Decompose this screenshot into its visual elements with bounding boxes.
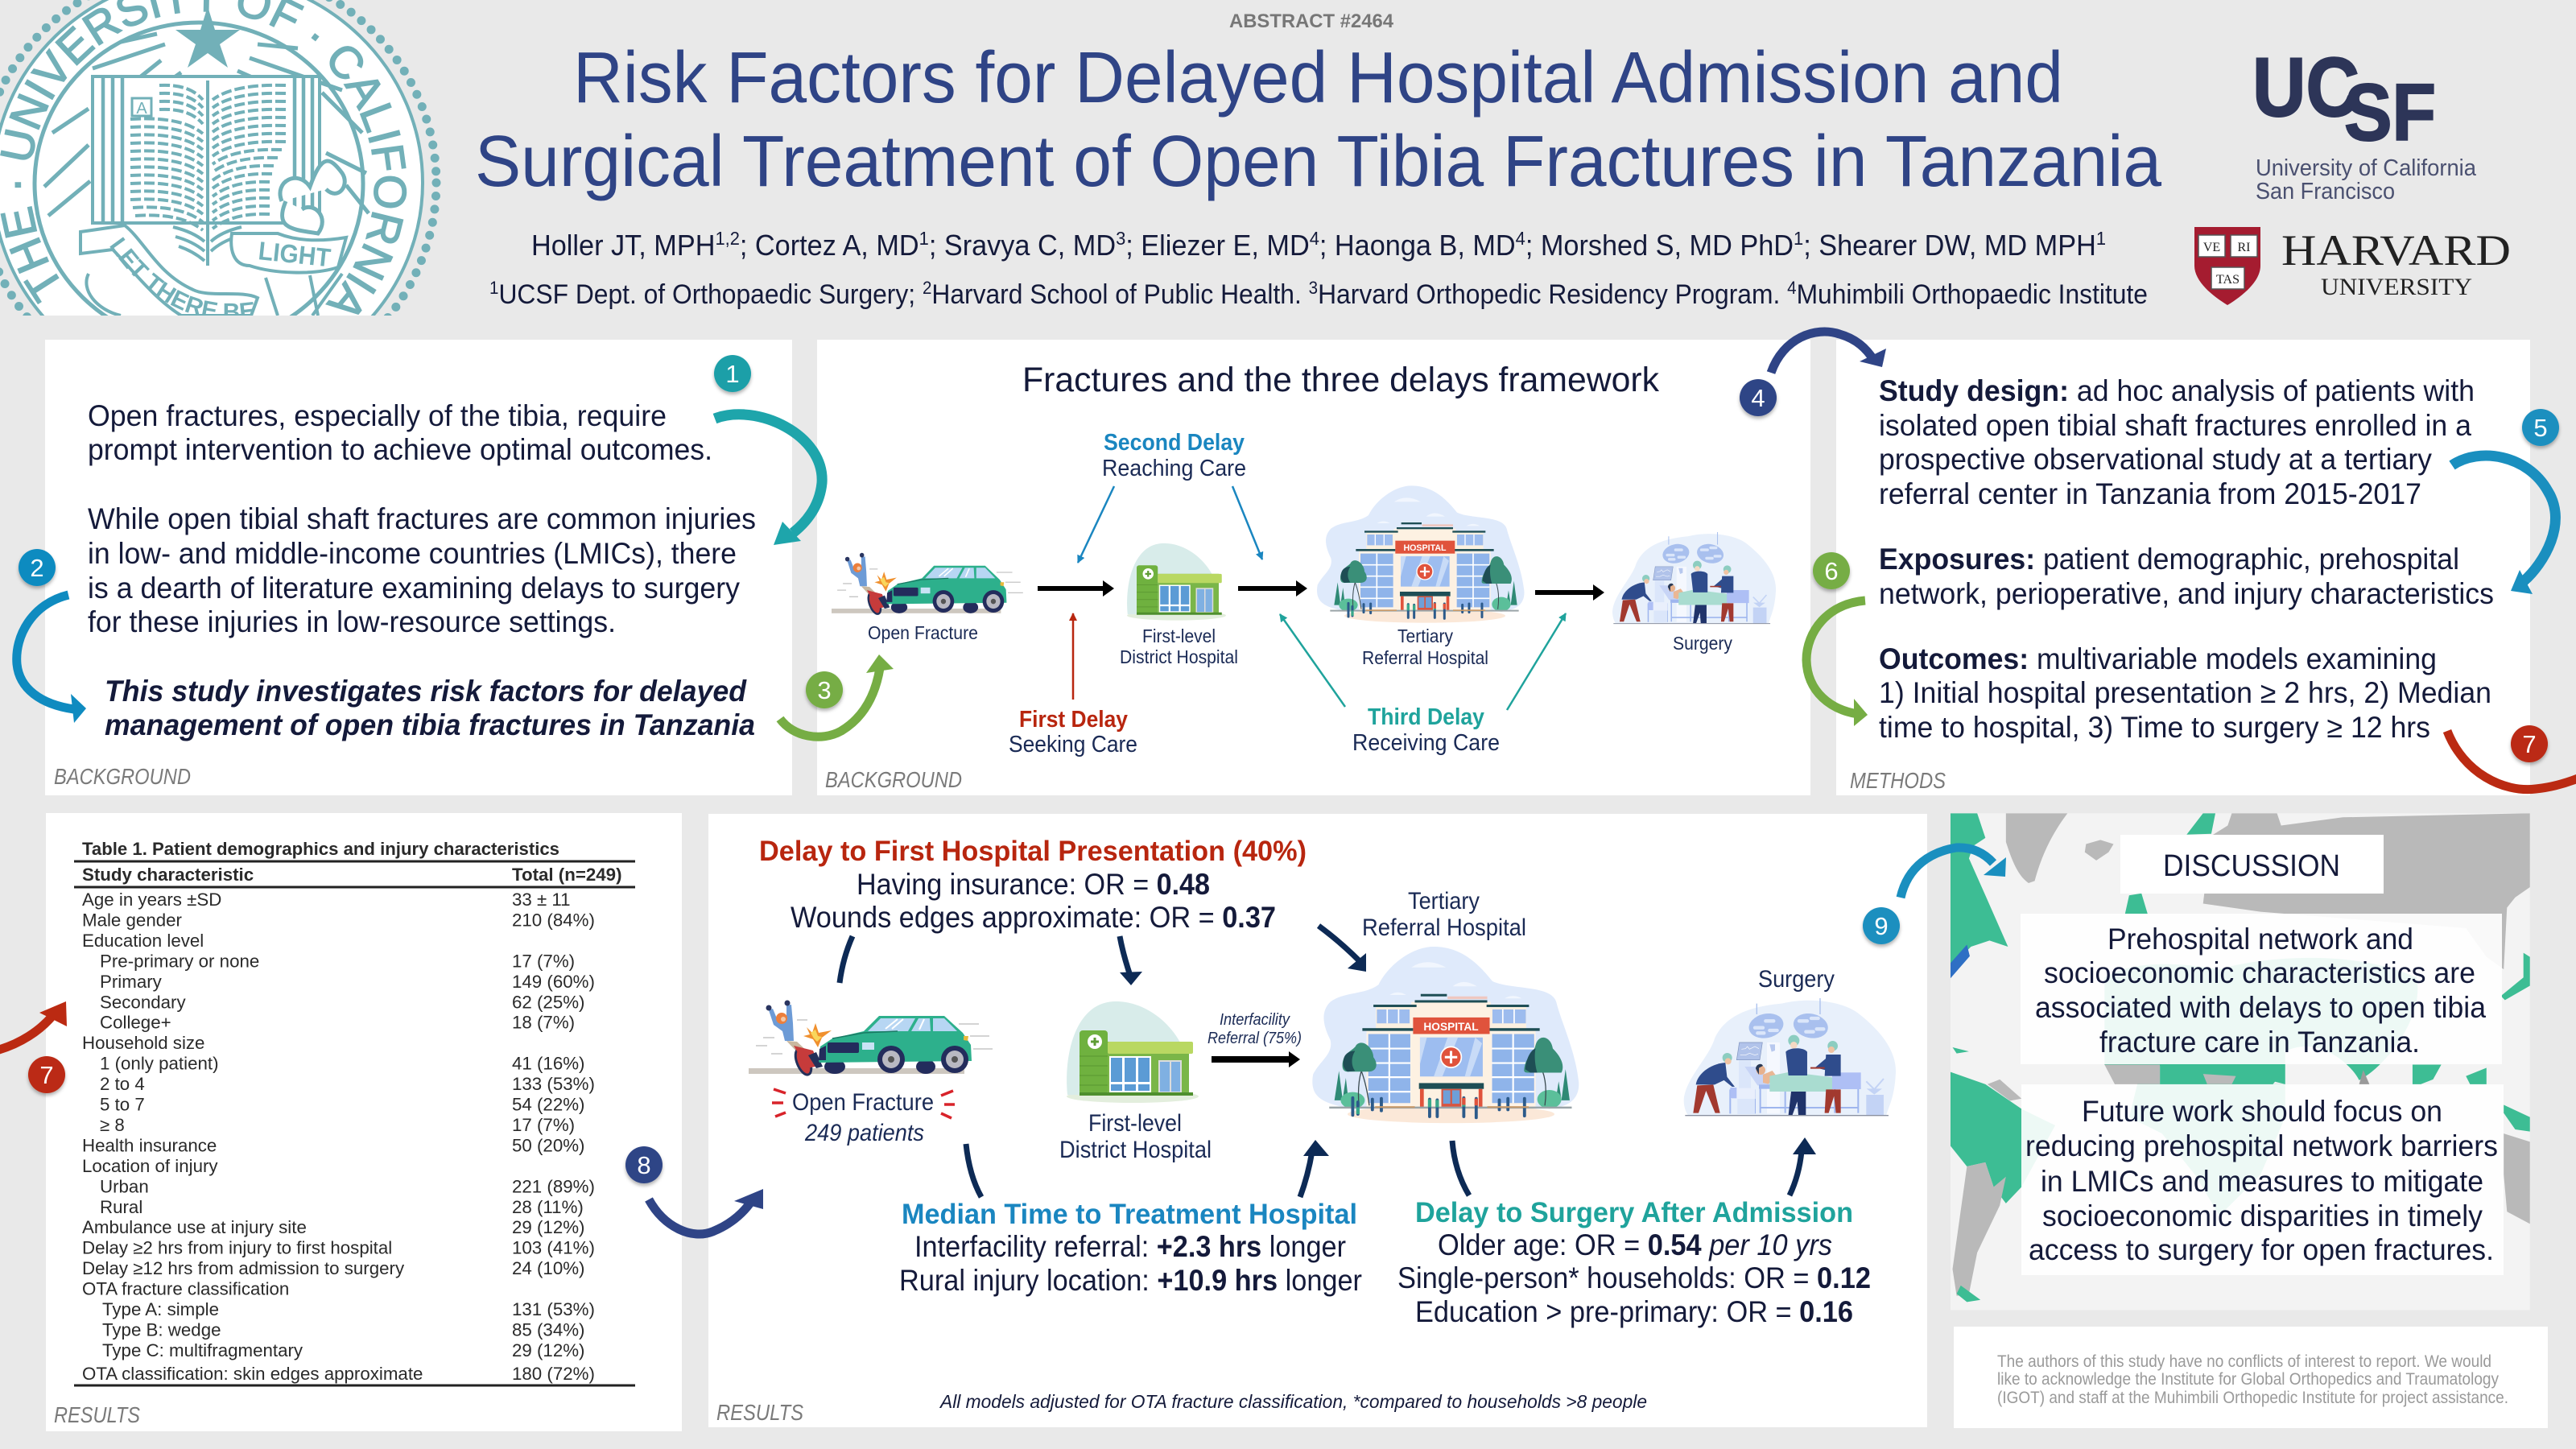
exposures xyxy=(1879,543,2494,610)
table rows: Ambulance use at injury site xyxy=(82,1217,307,1237)
icon: district clinic xyxy=(1127,543,1226,621)
intro text: in low- and middle-income countries (LMICs), there xyxy=(88,537,737,570)
future work box xyxy=(2021,1084,2504,1275)
arrow: to surgery xyxy=(1790,1137,1816,1195)
arrow: hospital link xyxy=(1452,1141,1469,1195)
interfacility referral note: Referral (75%) xyxy=(1208,1030,1302,1047)
step 1 badge and arrow xyxy=(714,355,822,545)
affiliations: 3 xyxy=(1309,278,1318,298)
step 6 badge and arrow xyxy=(1806,552,1868,726)
intro text: Open fractures, especially of the tibia, require xyxy=(88,399,667,432)
surgery delay results xyxy=(1397,1197,1871,1328)
conclusion box: associated with delays to open tibia xyxy=(2035,991,2486,1024)
table rows: Rural xyxy=(100,1197,142,1217)
table rows: 5 to 7 xyxy=(100,1095,145,1114)
step 4 badge and arrow xyxy=(1740,332,1886,416)
table rows: OTA classification: skin edges approximate xyxy=(82,1364,423,1384)
outcomes: Outcomes: multivariable models examining xyxy=(1879,642,2437,675)
step 2 badge and arrow xyxy=(17,549,86,723)
future work box: socioeconomic disparities in timely xyxy=(2042,1199,2483,1232)
table rows: 29 (12%) xyxy=(512,1340,584,1360)
table rows: ≥ 8 xyxy=(100,1115,125,1135)
step 9 badge and arrow xyxy=(1863,848,2006,944)
step 7 badge and arrow xyxy=(2447,725,2576,790)
future work box: Future work should focus on xyxy=(2082,1095,2442,1128)
icon: district clinic xyxy=(1067,1001,1199,1103)
authors: 4 xyxy=(1310,228,1319,249)
table rows: Delay ≥12 hrs from admission to surgery xyxy=(82,1258,405,1278)
authors: 1 xyxy=(2096,228,2106,249)
intro text: While open tibial shaft fractures are common injuries xyxy=(88,502,756,535)
Harvard logo: VE xyxy=(2203,241,2220,254)
table rows: 62 (25%) xyxy=(512,992,584,1012)
icon: referral hospital xyxy=(1317,485,1524,623)
future work box: in LMICs and measures to mitigate xyxy=(2041,1165,2483,1198)
table rows: 17 (7%) xyxy=(512,951,575,971)
affiliations: Harvard School of Public Health. xyxy=(931,279,1309,310)
step 4 badge and arrow: 4 xyxy=(1751,384,1765,412)
table rows: Pre-primary or none xyxy=(100,951,259,971)
step 8 badge and arrow: 8 xyxy=(637,1151,651,1179)
first hospital delay results: Delay to First Hospital Presentation (40%) xyxy=(759,836,1307,867)
conclusion box: Prehospital network and xyxy=(2107,923,2413,956)
open fracture label: 249 patients xyxy=(804,1120,924,1146)
panel: acknowledgements: The authors of this study have no conflicts of interest to report. We would xyxy=(1997,1352,2491,1371)
UCSF logo: SF xyxy=(2344,68,2436,158)
surgery delay results: Education > pre-primary: OR = 0.16 xyxy=(1415,1295,1853,1328)
third delay label: Receiving Care xyxy=(1352,730,1500,756)
table rows: 85 (34%) xyxy=(512,1320,584,1340)
intro text: prompt intervention to achieve optimal outcomes. xyxy=(88,433,712,466)
step 6 badge and arrow: 6 xyxy=(1824,557,1839,585)
authors: ; Shearer DW, MD MPH xyxy=(1803,229,2096,262)
panel: acknowledgements xyxy=(1954,1327,2548,1428)
table rows: 24 (10%) xyxy=(512,1258,584,1278)
discussion heading: DISCUSSION xyxy=(2163,849,2340,883)
arrow: third delay left xyxy=(1280,614,1345,707)
table header xyxy=(82,865,621,885)
table rows: Primary xyxy=(100,972,163,992)
table rows: Education level xyxy=(82,931,204,951)
step 5 badge and arrow: 5 xyxy=(2533,414,2548,442)
table rows: 54 (22%) xyxy=(512,1095,584,1114)
Harvard logo: RI xyxy=(2238,241,2251,254)
label: district hospital: First-level xyxy=(1142,625,1216,646)
heading: Fractures and the three delays framework xyxy=(1022,361,1659,399)
authors: 4 xyxy=(1516,228,1525,249)
table rows: Type C: multifragmentary xyxy=(102,1340,303,1360)
UC seal logo: A xyxy=(136,100,147,118)
first delay label xyxy=(1009,707,1137,758)
Harvard logo xyxy=(2194,226,2511,305)
UC seal logo: LET THERE BE xyxy=(109,237,254,314)
surgery delay results: Delay to Surgery After Admission xyxy=(1415,1197,1853,1228)
panel: discussion xyxy=(1951,813,2530,1311)
icon: referral hospital: HOSPITAL xyxy=(1423,1021,1479,1033)
study design xyxy=(1879,374,2475,510)
label: surgery: Surgery xyxy=(1673,633,1732,654)
label: district hospital xyxy=(1059,1110,1212,1163)
table rows: 149 (60%) xyxy=(512,972,595,992)
table title: Table 1. Patient demographics and injury characteristics xyxy=(82,839,559,859)
first delay label: First Delay xyxy=(1019,707,1128,733)
table rows: 41 (16%) xyxy=(512,1054,584,1074)
open fracture label: Open Fracture xyxy=(792,1089,934,1116)
title: Risk Factors for Delayed Hospital Admission and xyxy=(573,38,2063,118)
label: district hospital: District Hospital xyxy=(1059,1137,1212,1163)
step 9 badge and arrow: 9 xyxy=(1874,912,1889,940)
Harvard logo: UNIVERSITY xyxy=(2321,274,2472,300)
label: referral hospital xyxy=(1362,625,1488,668)
arrow: second delay right xyxy=(1232,486,1262,559)
study design: isolated open tibial shaft fractures enrolled in a xyxy=(1879,409,2471,442)
UCSF logo: UC xyxy=(2252,41,2359,134)
arrow: fracture link xyxy=(966,1144,981,1197)
table rows: Delay ≥2 hrs from injury to first hospital xyxy=(82,1238,392,1258)
table rows: Location of injury xyxy=(82,1156,218,1176)
table rows: 50 (20%) xyxy=(512,1135,584,1155)
table rows: 221 (89%) xyxy=(512,1176,595,1196)
authors: ; Eliezer E, MD xyxy=(1125,229,1310,262)
first delay label: Seeking Care xyxy=(1009,732,1137,758)
icon: car crash xyxy=(749,1000,993,1077)
table header: Total (n=249) xyxy=(512,865,621,885)
table rows: OTA fracture classification xyxy=(82,1279,289,1299)
interfacility referral note: Interfacility xyxy=(1220,1011,1290,1029)
step 3 badge and arrow xyxy=(780,654,894,737)
section label: BACKGROUND xyxy=(825,767,962,792)
table rows: Type B: wedge xyxy=(102,1320,221,1340)
study design: prospective observational study at a tertiary xyxy=(1879,443,2432,476)
label: tertiary hospital: Tertiary xyxy=(1408,888,1480,914)
median time results: Interfacility referral: +2.3 hrs longer xyxy=(914,1230,1346,1263)
step 7 continued badge and arrow xyxy=(0,1001,67,1093)
step 3 badge and arrow: 3 xyxy=(817,676,832,704)
table rows xyxy=(82,890,595,1384)
table rows: 1 (only patient) xyxy=(100,1054,219,1074)
outcomes: 1) Initial hospital presentation ≥ 2 hrs, 2) Median xyxy=(1879,676,2491,709)
arrow: hospital to surgery xyxy=(1535,584,1604,601)
affiliations: 1 xyxy=(489,278,498,298)
table rows: Age in years ±SD xyxy=(82,890,221,910)
study aim statement: This study investigates risk factors for delayed xyxy=(105,675,747,708)
title: Surgical Treatment of Open Tibia Fractures in Tanzania xyxy=(475,122,2162,202)
footnote: All models adjusted for OTA fracture classification, *compared to households >8 people xyxy=(939,1391,1647,1412)
table header: Study characteristic xyxy=(82,865,254,885)
conclusion box: socioeconomic characteristics are xyxy=(2044,956,2475,989)
future work box: reducing prehospital network barriers xyxy=(2025,1129,2498,1162)
table rows: 133 (53%) xyxy=(512,1074,595,1094)
study aim statement xyxy=(105,675,755,741)
label: district hospital: First-level xyxy=(1088,1110,1182,1137)
exposures: Exposures: patient demographic, prehospital xyxy=(1879,543,2459,576)
step 5 badge and arrow xyxy=(2452,409,2559,594)
third delay label: Third Delay xyxy=(1368,704,1484,730)
section label: RESULTS xyxy=(716,1400,803,1425)
affiliations: UCSF Dept. of Orthopaedic Surgery; xyxy=(498,279,923,310)
step 7 badge and arrow: 7 xyxy=(2522,730,2537,758)
table rows: Type A: simple xyxy=(102,1299,219,1319)
table rows: Urban xyxy=(100,1176,149,1196)
intro text: for these injuries in low-resource settings. xyxy=(88,605,616,638)
authors: 1 xyxy=(1794,228,1803,249)
table rows: College+ xyxy=(100,1013,171,1033)
intro text: is a dearth of literature examining delays to surgery xyxy=(88,572,740,605)
panel: table 1 xyxy=(46,813,682,1431)
surgery delay results: Single-person* households: OR = 0.12 xyxy=(1397,1261,1871,1294)
authors: Holler JT, MPH xyxy=(531,229,724,262)
label: referral hospital: Referral Hospital xyxy=(1362,647,1488,668)
arrow: third delay right xyxy=(1507,613,1566,710)
Harvard logo: HARVARD xyxy=(2281,226,2511,275)
open fracture label xyxy=(772,1089,955,1146)
median time results xyxy=(899,1199,1362,1297)
table rows: 28 (11%) xyxy=(512,1197,584,1217)
table rows: Male gender xyxy=(82,910,183,931)
arrow: insurance link xyxy=(840,936,852,983)
exposures: network, perioperative, and injury characteristics xyxy=(1879,577,2494,610)
authors: 3 xyxy=(1116,228,1125,249)
arrow: to treatment hospital xyxy=(1300,1140,1329,1197)
UCSF logo: San Francisco xyxy=(2256,179,2395,204)
conclusion box xyxy=(2021,914,2502,1064)
second delay label: Second Delay xyxy=(1104,430,1245,456)
arrow: clinic to hospital xyxy=(1238,580,1307,597)
table rows: Health insurance xyxy=(82,1135,217,1155)
icon: referral hospital xyxy=(1312,947,1579,1123)
authors: 1 xyxy=(919,228,929,249)
arrow: fracture to clinic xyxy=(1038,580,1114,597)
affiliations: 4 xyxy=(1787,278,1797,298)
label: surgery: Surgery xyxy=(1758,966,1835,993)
Harvard logo: TAS xyxy=(2216,273,2240,287)
table rows: 18 (7%) xyxy=(512,1013,575,1033)
affiliations: Muhimbili Orthopaedic Institute xyxy=(1797,279,2148,310)
discussion heading xyxy=(2120,835,2384,894)
icon: car crash xyxy=(832,553,1023,616)
section label: BACKGROUND xyxy=(54,764,191,789)
median time results: Median Time to Treatment Hospital xyxy=(902,1199,1357,1230)
label: district hospital: District Hospital xyxy=(1120,646,1238,667)
arrow: first delay xyxy=(1072,613,1074,700)
table rows: 33 ± 11 xyxy=(512,890,571,910)
study design: referral center in Tanzania from 2015-2017 xyxy=(1879,477,2421,510)
panel: background intro xyxy=(45,340,792,795)
panel: methods xyxy=(1836,340,2530,795)
affiliations: Harvard Orthopedic Residency Program. xyxy=(1318,279,1787,310)
arrow: interfacility xyxy=(1212,1051,1300,1067)
label: tertiary hospital: Referral Hospital xyxy=(1362,914,1526,941)
study design: Study design: ad hoc analysis of patients with xyxy=(1879,374,2475,407)
title xyxy=(475,38,2162,202)
third delay label xyxy=(1352,704,1500,756)
panel: acknowledgements: like to acknowledge the Institute for Global Orthopedics and Traumatology xyxy=(1997,1370,2499,1389)
section label: RESULTS xyxy=(54,1402,140,1427)
second delay label: Reaching Care xyxy=(1102,456,1246,481)
future work box: access to surgery for open fractures. xyxy=(2029,1233,2494,1266)
surgery delay results: Older age: OR = 0.54 per 10 yrs xyxy=(1438,1228,1832,1261)
UCSF logo: University of California xyxy=(2256,155,2477,181)
label: referral hospital: Tertiary xyxy=(1397,625,1453,646)
authors: ; Haonga B, MD xyxy=(1319,229,1516,262)
affiliations: 2 xyxy=(923,278,931,298)
label: district hospital xyxy=(1120,625,1238,667)
world map background xyxy=(1951,813,2530,1311)
outcomes: time to hospital, 3) Time to surgery ≥ 12 hrs xyxy=(1879,711,2430,744)
conclusion box: fracture care in Tanzania. xyxy=(2099,1026,2420,1059)
icon: referral hospital: HOSPITAL xyxy=(1403,543,1447,553)
table rows: 2 to 4 xyxy=(100,1074,145,1094)
table rows: 103 (41%) xyxy=(512,1238,595,1258)
panel: three delays framework xyxy=(817,340,1810,795)
table rows: Household size xyxy=(82,1033,204,1053)
second delay label xyxy=(1102,430,1246,481)
arrow: to tertiary xyxy=(1319,926,1366,972)
first hospital delay results xyxy=(759,836,1307,934)
median time results: Rural injury location: +10.9 hrs longer xyxy=(899,1264,1362,1297)
authors: ; Sravya C, MD xyxy=(929,229,1116,262)
arrow: to clinic xyxy=(1120,936,1142,985)
label: open fracture: Open Fracture xyxy=(868,622,978,643)
authors: ; Morshed S, MD PhD xyxy=(1525,229,1794,262)
table rows: Secondary xyxy=(100,992,186,1012)
label: tertiary hospital xyxy=(1362,888,1526,941)
table rows: 210 (84%) xyxy=(512,910,595,931)
first hospital delay results: Wounds edges approximate: OR = 0.37 xyxy=(791,901,1276,934)
table rows: 29 (12%) xyxy=(512,1217,584,1237)
UC seal logo: LIGHT xyxy=(257,236,332,272)
abstract number: ABSTRACT #2464 xyxy=(1229,10,1394,32)
outcomes xyxy=(1879,642,2491,744)
study aim statement: management of open tibia fractures in Tanzania xyxy=(105,708,755,741)
step 1 badge and arrow: 1 xyxy=(725,360,740,388)
intro text xyxy=(88,399,756,638)
step 8 badge and arrow xyxy=(625,1146,763,1234)
arrow: second delay left xyxy=(1078,486,1114,563)
table rows: 180 (72%) xyxy=(512,1364,595,1384)
first hospital delay results: Having insurance: OR = 0.48 xyxy=(857,868,1210,901)
panel: results pathway xyxy=(708,814,1927,1427)
interfacility referral note xyxy=(1208,1011,1302,1047)
icon: surgery xyxy=(1612,532,1776,624)
table rows: 17 (7%) xyxy=(512,1115,575,1135)
UCSF logo xyxy=(2252,41,2477,204)
step 7 continued badge and arrow: 7 xyxy=(39,1061,54,1089)
section label: METHODS xyxy=(1850,768,1946,793)
icon: surgery xyxy=(1684,998,1896,1116)
table rows: 131 (53%) xyxy=(512,1299,595,1319)
authors: 1,2 xyxy=(715,228,740,249)
authors: ; Cortez A, MD xyxy=(740,229,919,262)
panel: acknowledgements: (IGOT) and staff at the Muhimbili Orthopedic Institute for project assistance. xyxy=(1997,1389,2508,1407)
step 2 badge and arrow: 2 xyxy=(30,554,44,582)
